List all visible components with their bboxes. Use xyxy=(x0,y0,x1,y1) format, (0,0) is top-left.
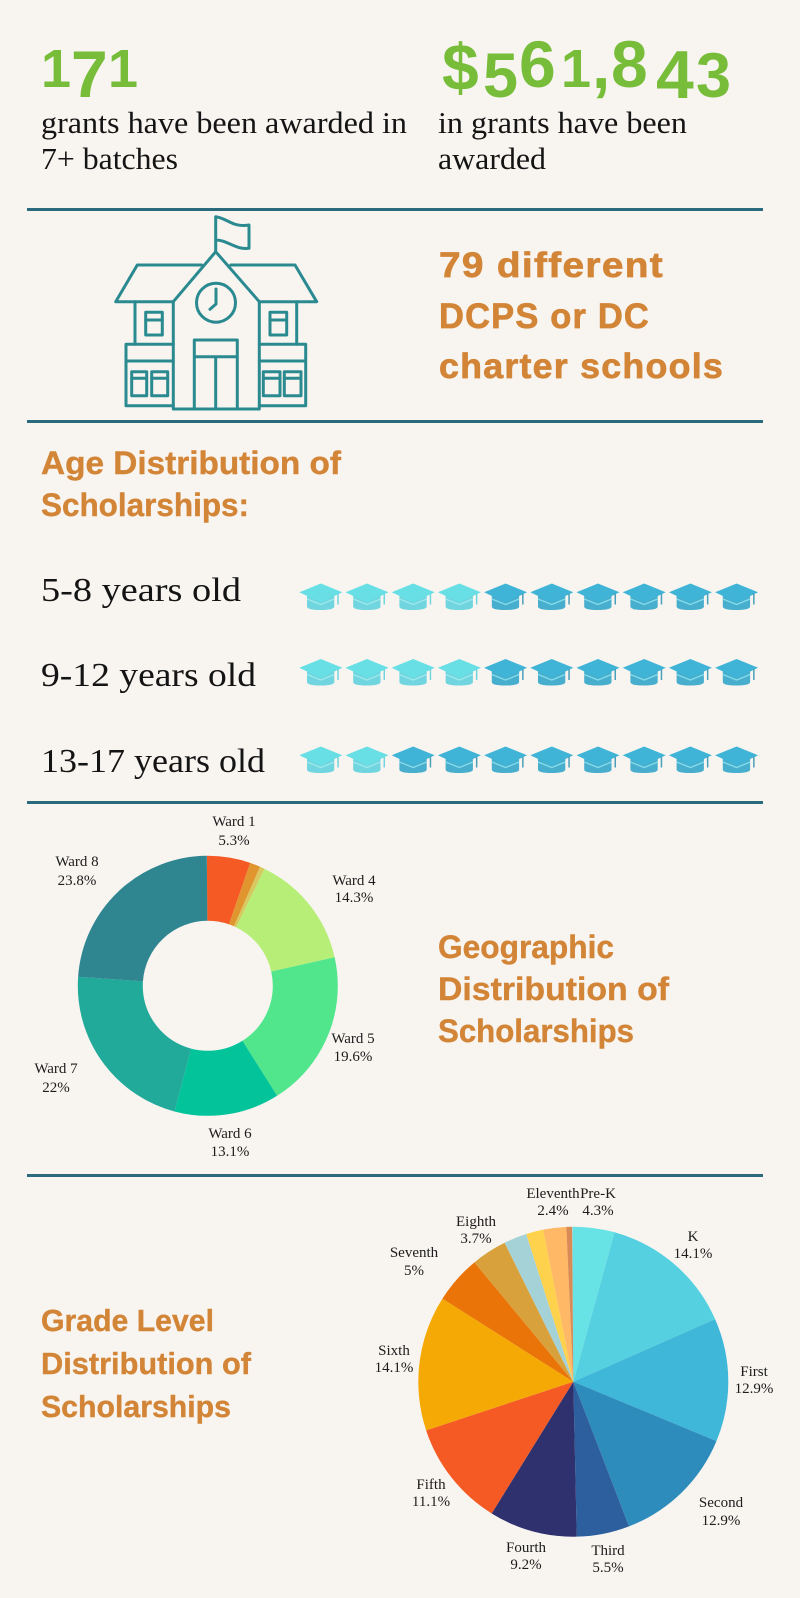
heading: grade level distribution xyxy=(41,1303,252,1424)
stat: 171 grants: grants have been awarded in xyxy=(41,105,408,140)
stat: $561,843 awarded: 1 xyxy=(561,39,591,99)
pie labels: Fifth xyxy=(416,1477,446,1493)
heading: 79 different schools: charter schools xyxy=(439,347,724,386)
heading: 79 different schools: 79 different xyxy=(439,246,664,285)
heading: geographic distribution xyxy=(438,929,669,1049)
stat: 171 grants xyxy=(41,37,408,176)
stat: $561,843 awarded: 3 xyxy=(696,41,731,111)
pie labels: 11.1% xyxy=(412,1494,450,1510)
heading: age distribution: Scholarships: xyxy=(41,487,249,523)
pie labels xyxy=(375,1186,773,1576)
row: 9-12 years old xyxy=(41,657,758,694)
panel: geographic distribution xyxy=(34,814,669,1160)
stat: $561,843 awarded xyxy=(438,27,731,176)
donut labels: Ward 8 xyxy=(55,854,99,870)
panel: headline statistics xyxy=(41,27,731,176)
pie labels: 14.1% xyxy=(375,1360,413,1376)
stat: $561,843 awarded: 6 xyxy=(519,27,556,101)
heading: age distribution xyxy=(41,445,341,523)
donut chart: wards xyxy=(110,888,305,1083)
row: 13-17 years old xyxy=(41,743,758,780)
donut labels: 19.6% xyxy=(334,1049,372,1065)
panel: grade level distribution xyxy=(41,1186,773,1576)
heading: 79 different schools xyxy=(439,246,724,386)
stat: $561,843 awarded: in grants have been xyxy=(438,105,688,140)
stat: $561,843 awarded: , xyxy=(592,28,610,102)
pie labels: Third xyxy=(591,1543,625,1559)
pie labels: 12.9% xyxy=(735,1381,773,1397)
donut labels: 13.1% xyxy=(211,1144,249,1160)
pie labels: 5.5% xyxy=(592,1560,624,1576)
pie labels: K xyxy=(688,1229,699,1245)
row: 5-8 years old: 5-8 years old xyxy=(41,572,241,609)
row: 9-12 years old: 9-12 years old xyxy=(41,657,256,694)
heading: geographic distribution: Distribution of xyxy=(438,971,669,1007)
donut labels: 14.3% xyxy=(335,890,373,906)
icon: school building xyxy=(116,217,317,409)
donut labels: Ward 7 xyxy=(34,1061,78,1077)
heading: grade level distribution: Scholarships xyxy=(41,1389,231,1424)
pie labels: 12.9% xyxy=(702,1513,740,1529)
donut labels: Ward 4 xyxy=(332,873,376,889)
pie labels: Seventh xyxy=(390,1245,439,1261)
pie labels: Eighth xyxy=(456,1214,496,1230)
pie chart: grades xyxy=(496,1304,651,1459)
stat: 171 grants: 1 xyxy=(108,39,138,99)
heading: geographic distribution: Geographic xyxy=(438,929,614,965)
pie labels: Second xyxy=(699,1495,744,1511)
donut labels: 23.8% xyxy=(58,873,96,889)
pie labels: Sixth xyxy=(378,1343,410,1359)
stat: 171 grants: 7+ batches xyxy=(41,141,178,176)
pie labels: 14.1% xyxy=(674,1246,712,1262)
panel: age distribution xyxy=(41,445,758,780)
heading: age distribution: Age Distribution of xyxy=(41,445,341,481)
row: 5-8 years old xyxy=(41,572,758,610)
pie labels: 2.4% xyxy=(537,1203,569,1219)
stat: $561,843 awarded: 8 xyxy=(611,27,648,101)
donut labels xyxy=(34,814,376,1160)
pie labels: Fourth xyxy=(506,1540,546,1556)
donut labels: Ward 5 xyxy=(331,1031,375,1047)
pie labels: Pre-K xyxy=(580,1186,616,1202)
donut labels: 22% xyxy=(42,1080,70,1096)
pie labels: First xyxy=(740,1364,769,1380)
pie labels: 4.3% xyxy=(582,1203,614,1219)
stat: $561,843 awarded: 4 xyxy=(656,37,694,113)
stat: $561,843 awarded: $ xyxy=(442,30,479,104)
pie labels: Eleventh xyxy=(526,1186,580,1202)
heading: 79 different schools: DCPS or DC xyxy=(439,297,650,336)
pie labels: 5% xyxy=(404,1263,424,1279)
heading: geographic distribution: Scholarships xyxy=(438,1013,634,1049)
stat: 171 grants: 1 xyxy=(41,39,71,99)
pie labels: 9.2% xyxy=(510,1557,542,1573)
donut labels: Ward 1 xyxy=(212,814,256,830)
donut labels: Ward 6 xyxy=(208,1126,252,1142)
stat: $561,843 awarded: awarded xyxy=(438,141,547,176)
stat: $561,843 awarded: 5 xyxy=(483,41,518,111)
heading: grade level distribution: Grade Level xyxy=(41,1303,214,1338)
panel: schools xyxy=(116,217,724,409)
pie labels: 3.7% xyxy=(460,1231,492,1247)
heading: grade level distribution: Distribution of xyxy=(41,1346,252,1381)
row: 13-17 years old: 13-17 years old xyxy=(41,743,265,780)
stat: 171 grants: 7 xyxy=(71,37,108,111)
donut labels: 5.3% xyxy=(218,833,250,849)
